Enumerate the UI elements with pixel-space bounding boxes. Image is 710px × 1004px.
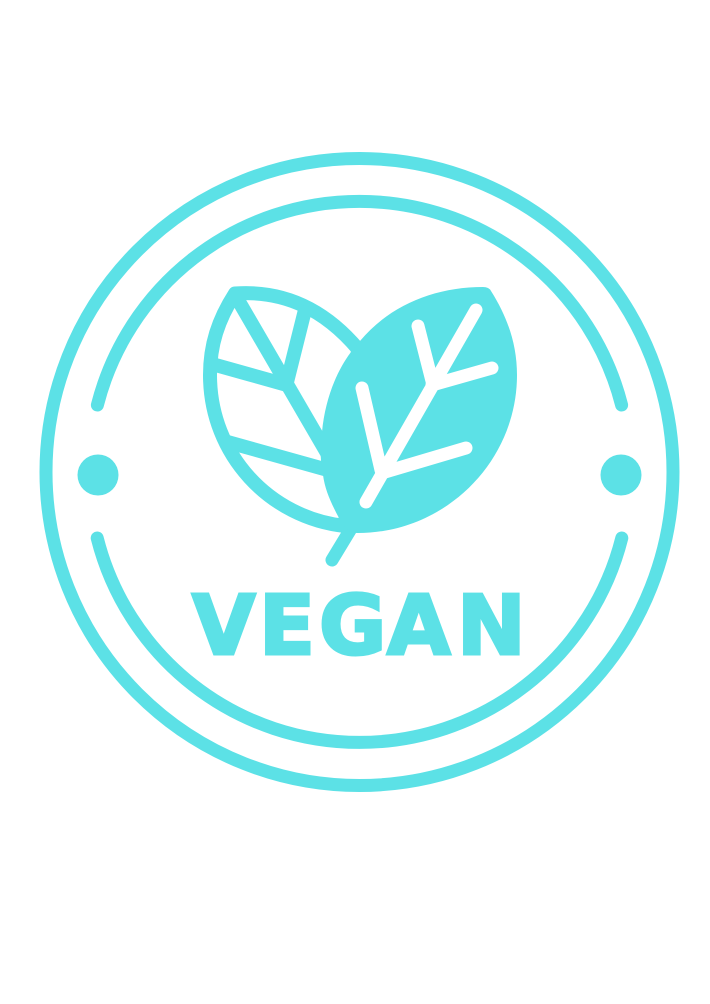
inner bottom arc	[97, 538, 622, 742]
wordmark: VEGAN	[192, 579, 526, 674]
right dot	[600, 454, 642, 496]
inner top arc	[97, 201, 622, 405]
icon: solid right leaf	[321, 287, 517, 533]
outer ring	[46, 158, 673, 786]
icon: right leaf veins	[362, 310, 492, 502]
icon: stem	[332, 527, 352, 560]
icon: outlined left leaf	[210, 293, 358, 526]
left dot	[78, 454, 118, 496]
icon: two leaves	[210, 287, 517, 560]
